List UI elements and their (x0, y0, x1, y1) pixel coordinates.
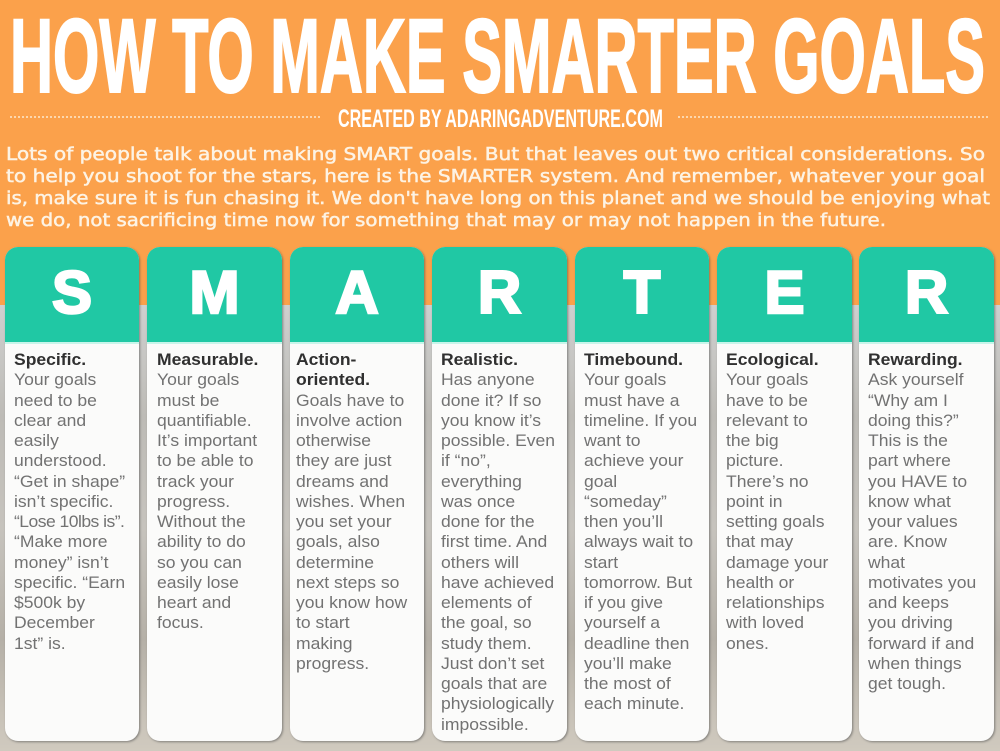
card: M: Your goals (157, 371, 239, 389)
card: R: have achieved (441, 574, 554, 592)
intro paragraph: we do, not sacrificing time now for something that may or may not happen in the future. (6, 210, 886, 231)
card: R: forward if and (868, 634, 974, 652)
card: M: Without the (157, 513, 246, 531)
card: T: always wait to (584, 533, 693, 551)
card: M: must be (157, 392, 219, 410)
card: R: you driving (868, 614, 953, 632)
card: E: ones. (726, 634, 769, 652)
card: R: goals that are (441, 675, 547, 693)
card: R: others will (441, 554, 519, 572)
card: R: impossible. (441, 716, 529, 734)
card: S: December (14, 614, 95, 632)
card: T: start (584, 554, 618, 572)
header text (6, 0, 990, 231)
card: S: need to be (14, 392, 97, 410)
background: cloudy sky (0, 305, 1000, 751)
intro paragraph (6, 144, 990, 231)
card: A: to start (296, 614, 350, 632)
card: T: Your goals (584, 371, 666, 389)
card: E: picture. (726, 452, 784, 470)
card: M: track your (157, 472, 234, 490)
card: A: wishes. When (296, 493, 405, 511)
card: E: the big (726, 432, 779, 450)
card: A: Goals have to (296, 392, 404, 410)
card: T: want to (584, 432, 641, 450)
card: R: Has anyone (441, 371, 535, 389)
card: R: R (905, 259, 948, 326)
card: M: heart and (157, 594, 231, 612)
card: R: know what (868, 493, 951, 511)
card: T: you’ll make (584, 655, 672, 673)
card: S: “Lose 10lbs is”. (14, 513, 124, 531)
card: R: Realistic. (441, 351, 518, 369)
card: A: you know how (296, 594, 407, 612)
card: R: if “no”, (441, 452, 491, 470)
card: S: isn’t specific. (14, 493, 113, 511)
card: A: you set your (296, 513, 392, 531)
card: R (432, 247, 567, 741)
card: M: focus. (157, 614, 204, 632)
card: E: E (764, 259, 805, 326)
card: R: doing this?” (868, 412, 959, 430)
card: T: T (624, 259, 660, 326)
card: S: easily (14, 432, 59, 450)
card: A (290, 247, 424, 741)
card: T: the most of (584, 675, 671, 693)
card: A: Action- (296, 351, 356, 369)
card: R: part where (868, 452, 951, 470)
card: T: then you’ll (584, 513, 663, 531)
card: S: clear and (14, 412, 86, 430)
card: R: was once (441, 493, 515, 511)
card: E: health or (726, 574, 794, 592)
intro paragraph: to help you shoot for the stars, here is the SMARTER system. And remember, whatever your goal (6, 166, 985, 187)
card: E: with loved (726, 614, 804, 632)
card: M: Measurable. (157, 351, 258, 369)
card: M: to be able to (157, 452, 254, 470)
card: R: your values (868, 513, 958, 531)
card: A: determine (296, 554, 374, 572)
card: A: otherwise (296, 432, 371, 450)
card: S: $500k by (14, 594, 85, 612)
card: T: if you give (584, 594, 663, 612)
card: R: Ask yourself (868, 371, 964, 389)
card: A: oriented. (296, 371, 370, 389)
card: R: done it? If so (441, 392, 541, 410)
card: S: “Make more (14, 533, 108, 551)
card: R: get tough. (868, 675, 946, 693)
card: S: “Get in shape” (14, 472, 125, 490)
card: R: what (868, 554, 905, 572)
card: T: timeline. If you (584, 412, 697, 430)
card: R: first time. And (441, 533, 547, 551)
card: A: they are just (296, 452, 392, 470)
card: M: easily lose (157, 574, 239, 592)
card: A: A (335, 259, 379, 326)
card: E: There’s no (726, 472, 809, 490)
card: R: “Why am I (868, 392, 948, 410)
card: M: It’s important (157, 432, 257, 450)
card: T: deadline then (584, 634, 689, 652)
card: M: quantifiable. (157, 412, 252, 430)
card: R: the goal, so (441, 614, 532, 632)
card: M: ability to do (157, 533, 246, 551)
card: R: elements of (441, 594, 532, 612)
card: R: and keeps (868, 594, 949, 612)
card: M: progress. (157, 493, 230, 511)
card: R: everything (441, 472, 522, 490)
card: A: dreams and (296, 472, 389, 490)
card: S: understood. (14, 452, 107, 470)
subtitle: CREATED BY ADARINGADVENTURE.COM (338, 105, 663, 133)
card: M (147, 247, 282, 741)
card: E: Ecological. (726, 351, 819, 369)
card: E: point in (726, 493, 783, 511)
card: S: money” isn’t (14, 554, 109, 572)
card: R: done for the (441, 513, 535, 531)
card: S: Your goals (14, 371, 96, 389)
card: R: you HAVE to (868, 472, 967, 490)
card: T: must have a (584, 392, 680, 410)
card: R: This is the (868, 432, 948, 450)
card: T: tomorrow. But (584, 574, 692, 592)
card: R: possible. Even (441, 432, 555, 450)
card: R: R (478, 259, 521, 326)
card: E: damage your (726, 554, 828, 572)
card: E (717, 247, 852, 741)
card: R: physiologically (441, 695, 554, 713)
card: A: goals, also (296, 533, 380, 551)
card: R: when things (868, 655, 962, 673)
card: A: next steps so (296, 574, 399, 592)
card: M: so you can (157, 554, 242, 572)
card: R: motivates you (868, 574, 976, 592)
card: E: that may (726, 533, 793, 551)
card: R: Rewarding. (868, 351, 963, 369)
card: A: making (296, 634, 353, 652)
card: T: achieve your (584, 452, 683, 470)
card: A: involve action (296, 412, 402, 430)
card: R: are. Know (868, 533, 947, 551)
card: T: yourself a (584, 614, 660, 632)
card: T: Timebound. (584, 351, 683, 369)
card: R: study them. (441, 634, 532, 652)
card: E: Your goals (726, 371, 808, 389)
card: R: you know it’s (441, 412, 541, 430)
card: T (575, 247, 709, 741)
card: A: progress. (296, 655, 369, 673)
card: S (5, 247, 139, 741)
card: R (859, 247, 994, 741)
card: S: specific. “Earn (14, 574, 125, 592)
card: M: M (190, 259, 239, 326)
card: T: each minute. (584, 695, 684, 713)
intro paragraph: is, make sure it is fun chasing it. We don't have long on this planet and we should be enjoying what (6, 188, 990, 209)
card: R: Just don’t set (441, 655, 544, 673)
intro paragraph: Lots of people talk about making SMART goals. But that leaves out two critical considerations. So (6, 144, 985, 165)
card: T: goal (584, 472, 617, 490)
card: E: setting goals (726, 513, 824, 531)
card: E: relationships (726, 594, 824, 612)
card: E: relevant to (726, 412, 808, 430)
card: T: “someday” (584, 493, 667, 511)
card: E: have to be (726, 392, 808, 410)
card: S: Specific. (14, 351, 86, 369)
card: S: S (52, 259, 92, 326)
card: S: 1st” is. (14, 634, 66, 652)
